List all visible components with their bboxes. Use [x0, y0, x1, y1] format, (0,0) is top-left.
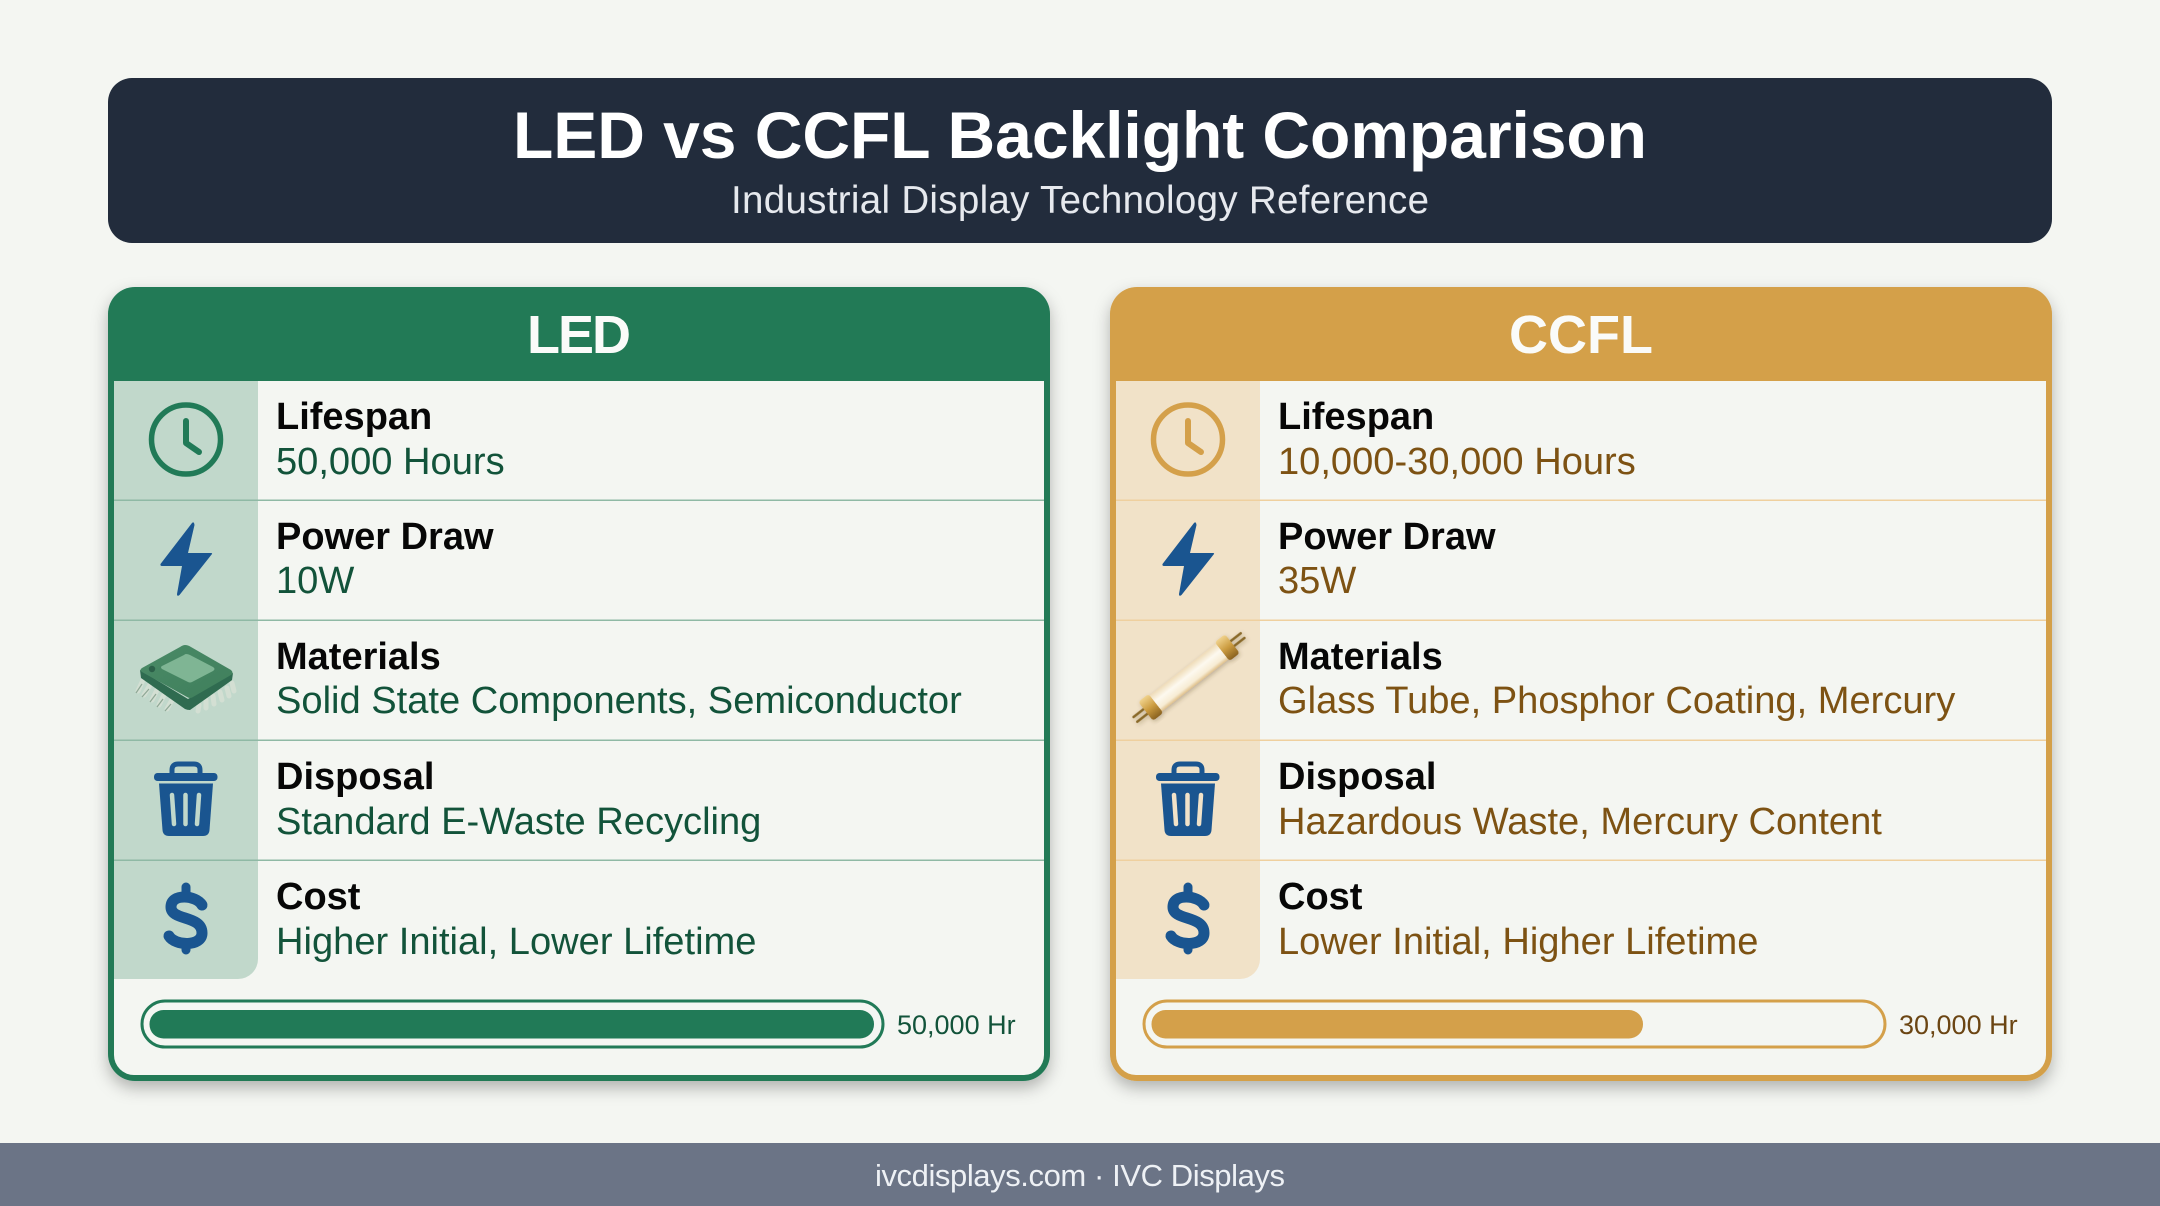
icon: clock: [152, 405, 220, 474]
title: LED vs CCFL Backlight Comparison: [513, 98, 1647, 172]
row: disposal: Standard E-Waste Recycling: [276, 801, 761, 843]
icon: dollar sign: [1171, 887, 1204, 950]
icon: lightning bolt: [1162, 522, 1214, 596]
row: cost: Lower Initial, Higher Lifetime: [1278, 921, 1758, 963]
row: power draw: 10W: [276, 560, 354, 602]
row: lifespan: 50,000 Hours: [276, 441, 505, 483]
subtitle: Industrial Display Technology Reference: [731, 179, 1429, 222]
row: materials: [276, 636, 962, 722]
icon: trash can: [154, 764, 218, 836]
row: cost: [1278, 876, 1758, 963]
row: disposal: [1278, 756, 1882, 843]
row: cost: Cost: [276, 876, 361, 918]
title banner: [108, 78, 2052, 243]
row: cost: Higher Initial, Lower Lifetime: [276, 921, 756, 963]
row: power draw: [1278, 516, 1496, 602]
icon: fluorescent tube: [1128, 626, 1250, 729]
icon: lightning bolt: [160, 522, 212, 596]
row: lifespan: 10,000-30,000 Hours: [1278, 441, 1636, 483]
panel: CCFL: [1110, 287, 2052, 1081]
icon: clock: [1154, 405, 1222, 474]
panel heading: CCFL: CCFL: [1509, 305, 1653, 365]
bar value: 30,000 Hr: [1899, 1010, 2018, 1040]
panel: LED: [108, 287, 1050, 1081]
row: disposal: Hazardous Waste, Mercury Content: [1278, 801, 1882, 843]
row: lifespan: [1278, 396, 1636, 483]
row: power draw: 35W: [1278, 560, 1356, 602]
row: lifespan: Lifespan: [1278, 396, 1434, 438]
progress bar: LED: [142, 1001, 1016, 1047]
row: lifespan: [276, 396, 505, 483]
row: disposal: Disposal: [1278, 756, 1436, 798]
row: disposal: [276, 756, 761, 843]
icon: trash can: [1156, 764, 1220, 836]
row: cost: [276, 876, 756, 963]
progress bar: CCFL: [1144, 1001, 2018, 1047]
row: lifespan: Lifespan: [276, 396, 432, 438]
row: power draw: [276, 516, 494, 602]
row: power draw: Power Draw: [1278, 516, 1496, 558]
footer text: ivcdisplays.com · IVC Displays: [875, 1158, 1285, 1193]
panel heading: LED: LED: [527, 305, 631, 365]
bar value: 50,000 Hr: [897, 1010, 1016, 1040]
row: power draw: Power Draw: [276, 516, 494, 558]
footer: [0, 1143, 2160, 1206]
row: materials: Glass Tube, Phosphor Coating, Mercury: [1278, 680, 1955, 722]
row: materials: Solid State Components, Semiconductor: [276, 680, 962, 722]
icon: dollar sign: [169, 887, 202, 950]
row: materials: [1278, 636, 1955, 722]
row: disposal: Disposal: [276, 756, 434, 798]
row: materials: Materials: [1278, 636, 1443, 678]
row: cost: Cost: [1278, 876, 1363, 918]
icon: semiconductor chip: [136, 645, 234, 711]
row: materials: Materials: [276, 636, 441, 678]
